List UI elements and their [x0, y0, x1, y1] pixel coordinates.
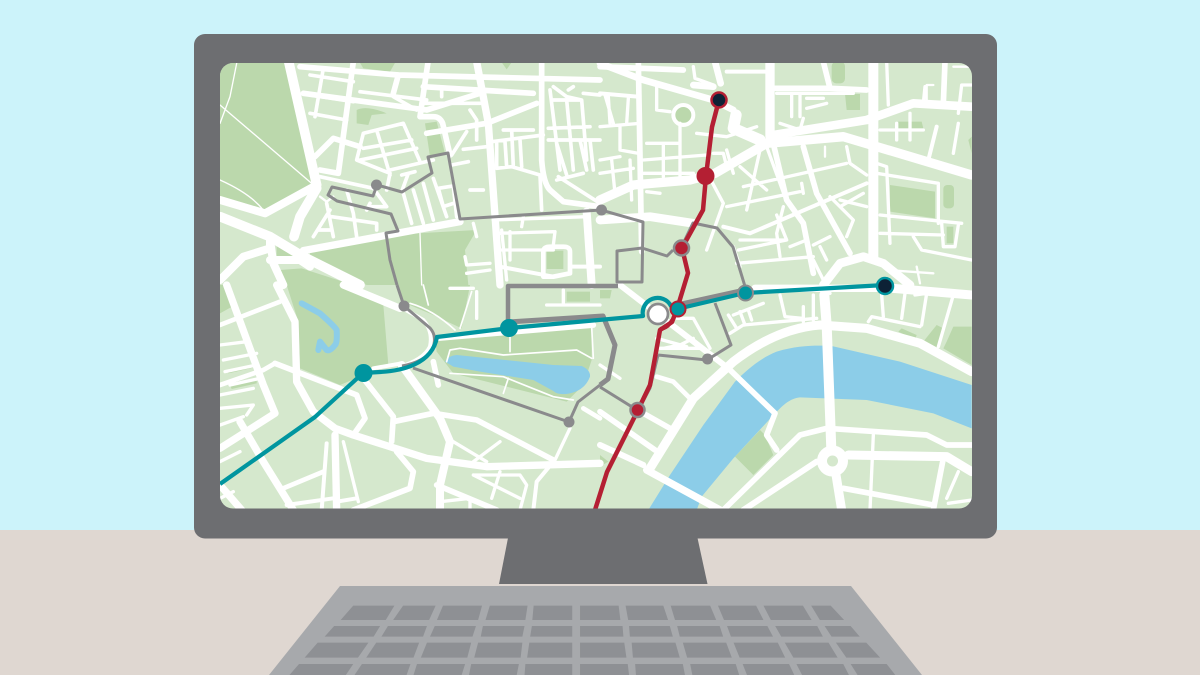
station: red	[696, 167, 714, 185]
station: red and grey	[674, 240, 689, 256]
background: sky	[0, 0, 1200, 531]
station: interchange	[670, 302, 686, 316]
station: teal central	[500, 319, 518, 337]
station: grey park	[398, 300, 410, 312]
monitor stand	[499, 538, 708, 584]
map land	[220, 63, 972, 509]
streets: south-west	[220, 285, 600, 510]
parks	[220, 60, 972, 475]
station: grey south	[564, 416, 574, 428]
screen: street map	[220, 60, 972, 510]
station: grey	[702, 354, 713, 364]
water: river and lakes	[302, 303, 972, 510]
interchange ring	[648, 304, 672, 329]
transit route: grey lines	[328, 153, 747, 422]
transit route: red line	[595, 100, 719, 510]
streets	[220, 60, 972, 510]
station: teal and grey	[738, 286, 753, 300]
background: desk	[0, 530, 1200, 675]
streets: south-east	[600, 285, 972, 510]
station: red terminus	[712, 92, 726, 108]
transit route: teal line	[220, 285, 885, 484]
station: teal terminus	[877, 278, 893, 294]
roundabout	[817, 446, 848, 476]
keyboard keys	[289, 606, 895, 675]
streets: north-east	[600, 62, 972, 293]
monitor casing	[194, 34, 997, 538]
station: teal west	[354, 364, 372, 382]
station: grey north	[596, 204, 607, 216]
streets: north-west	[220, 60, 600, 285]
station: grey north-west	[371, 180, 382, 190]
keyboard	[269, 586, 922, 675]
station: red and grey south	[630, 403, 644, 417]
